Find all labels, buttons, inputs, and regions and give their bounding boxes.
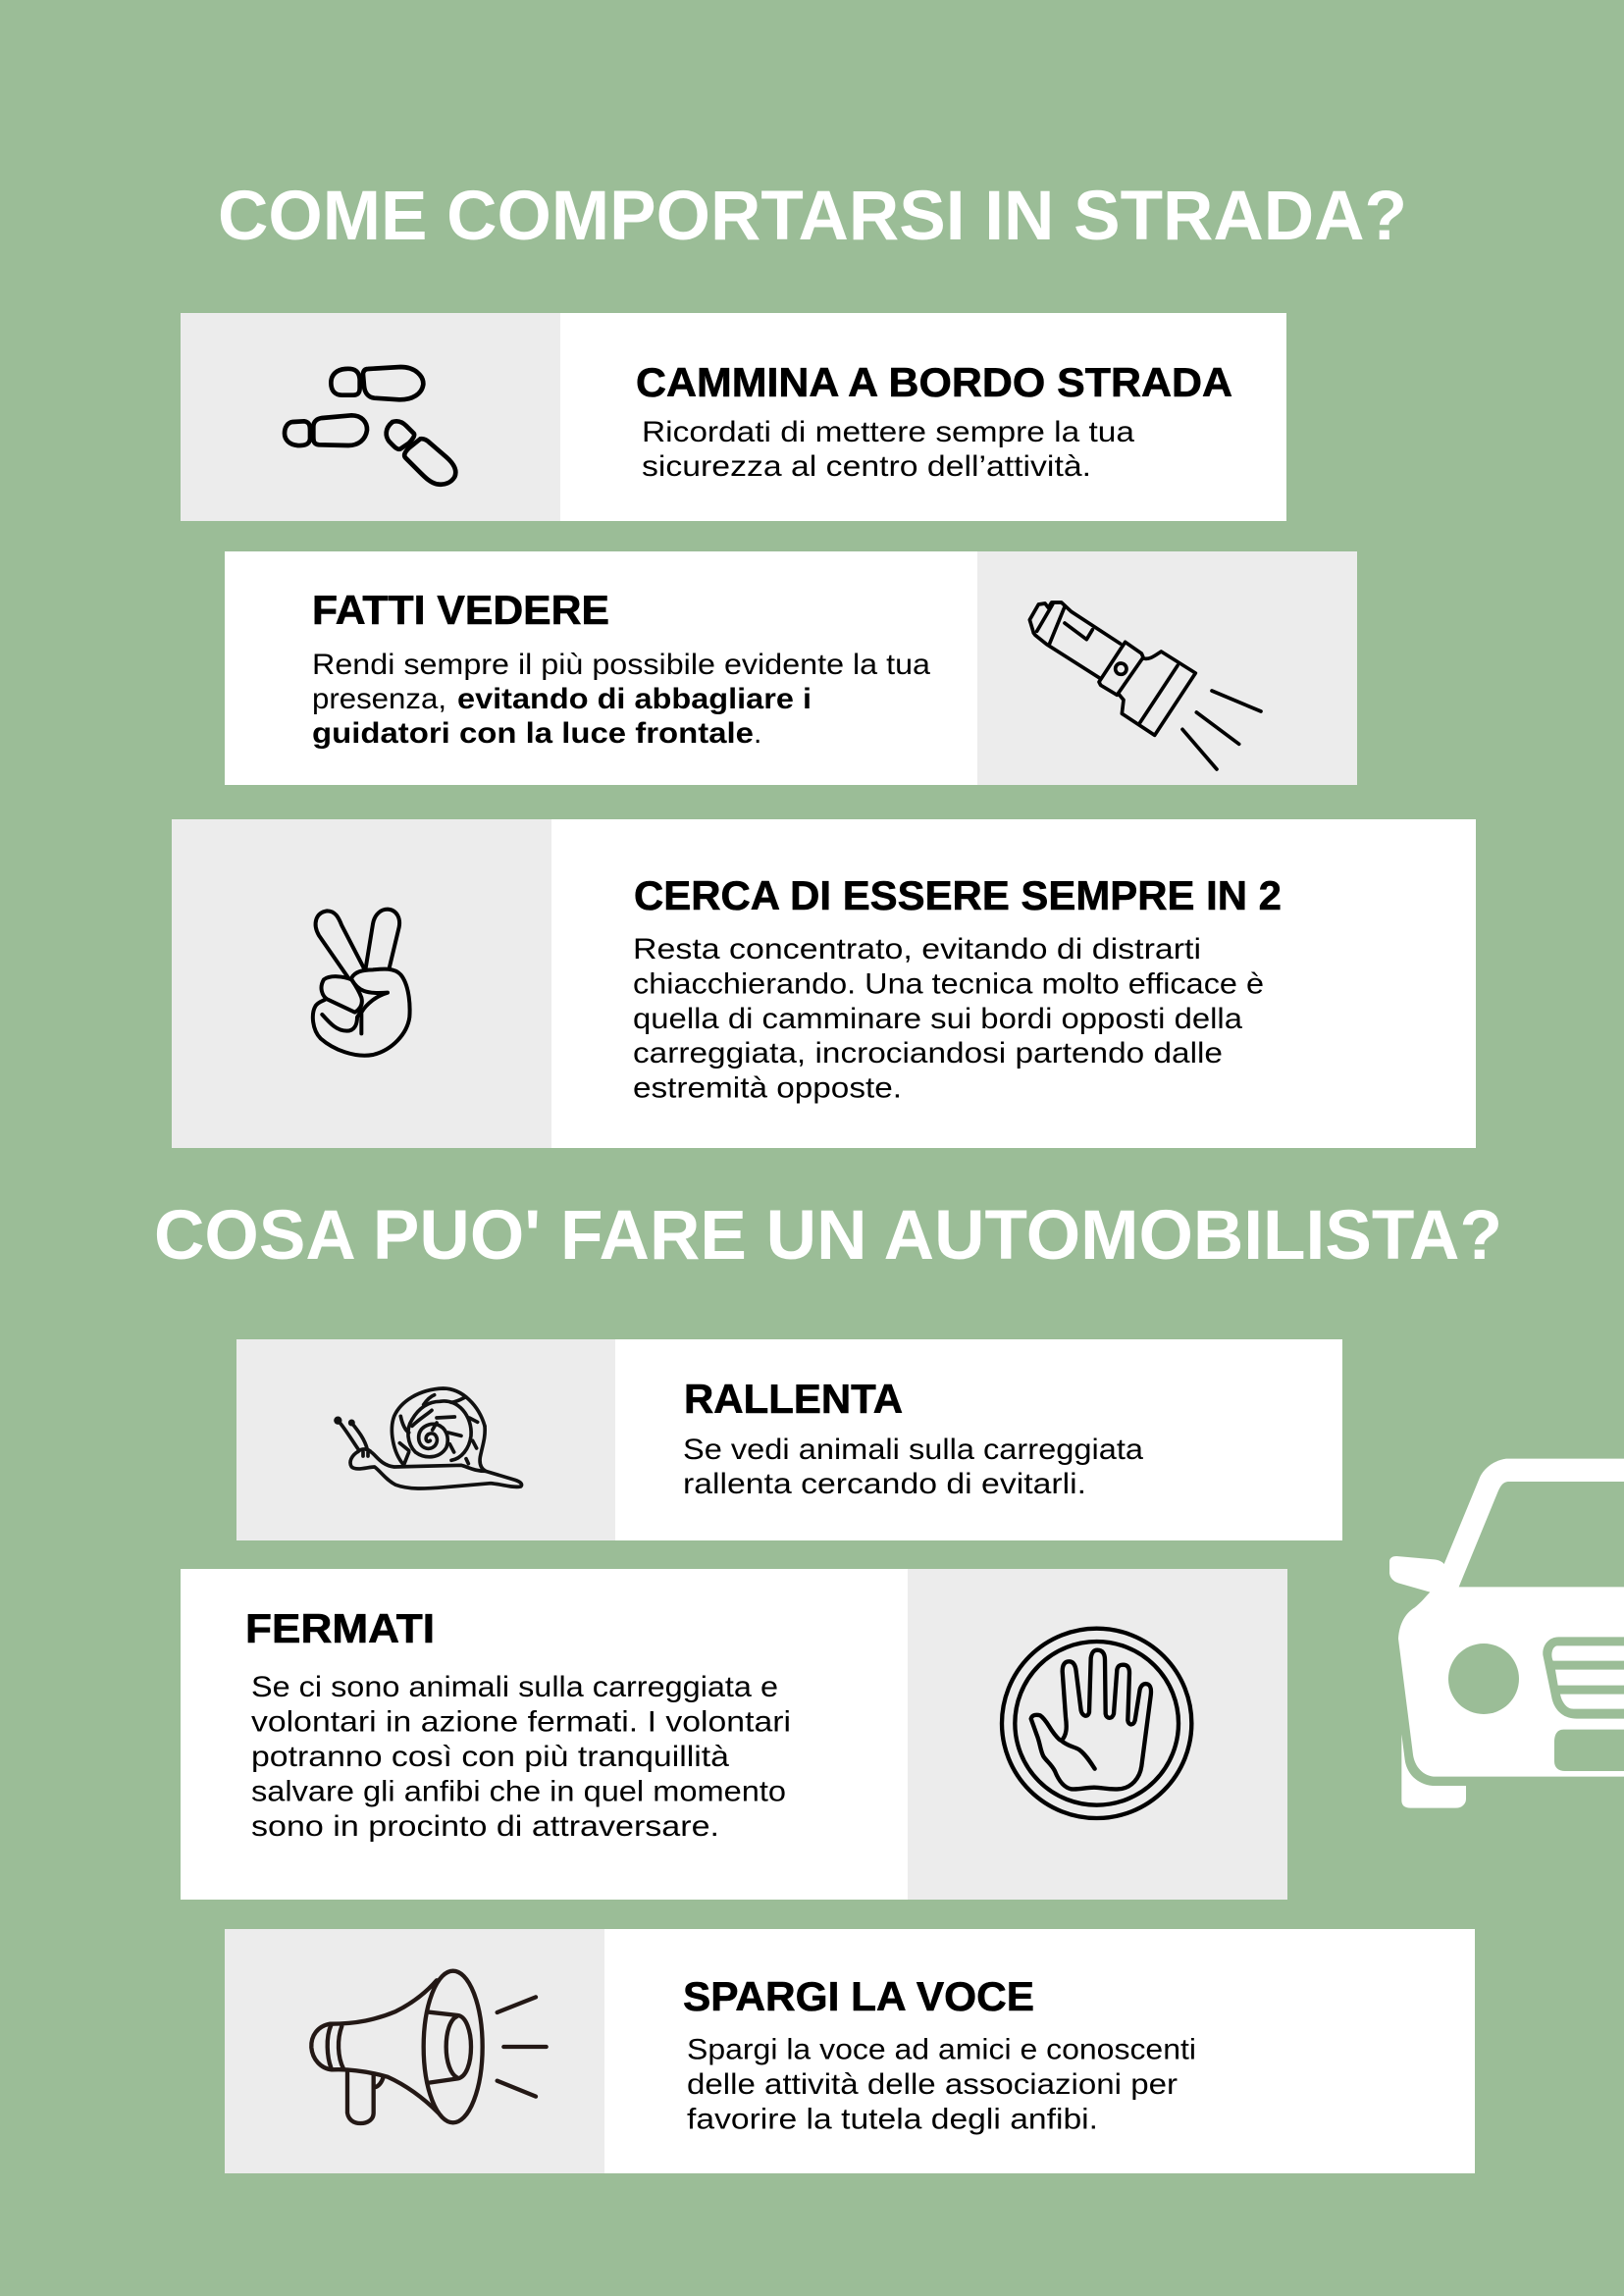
heading: CERCA DI ESSERE SEMPRE IN 2 (634, 872, 1282, 918)
body text (312, 649, 930, 750)
icon: white car (1389, 1459, 1624, 1808)
body text: rallenta cercando di evitarli. (683, 1468, 1086, 1500)
card background (172, 819, 1476, 1148)
icon tile (977, 551, 1357, 785)
body text: . (754, 717, 761, 750)
body text: Se vedi animali sulla carreggiata (683, 1434, 1143, 1466)
icon: footprints (285, 367, 455, 485)
body text: sono in procinto di attraversare. (251, 1810, 719, 1843)
body text: guidatori con la luce frontale (312, 717, 754, 750)
body text: estremità opposte. (633, 1071, 902, 1105)
panel: fatti vedere (225, 551, 1357, 785)
panel: rallenta (236, 1339, 1342, 1540)
icon: flashlight (1029, 602, 1261, 769)
heading: FERMATI (245, 1605, 435, 1651)
body text: Ricordati di mettere sempre la tua (642, 416, 1134, 448)
title: come comportarsi in strada: COME COMPORTARSI IN STRADA? (218, 178, 1407, 255)
icon tile (236, 1339, 615, 1540)
panel: cerca di essere sempre in 2 (172, 819, 1476, 1148)
title: cosa puo fare un automobilista: COSA PUO' FARE UN AUTOMOBILISTA? (154, 1197, 1502, 1275)
body text: volontari in azione fermati. I volontari (251, 1705, 791, 1739)
icon tile (225, 1929, 604, 2173)
card background (236, 1339, 1342, 1540)
icon tile (172, 819, 551, 1148)
body text (633, 933, 1264, 1105)
panel: cammina a bordo strada (181, 313, 1286, 521)
body text: Spargi la voce ad amici e conoscenti (687, 2033, 1196, 2066)
icon tile (181, 313, 560, 521)
heading: FATTI VEDERE (312, 587, 609, 633)
icon: peace hand (313, 910, 410, 1056)
body text (642, 416, 1134, 483)
body text: salvare gli anfibi che in quel momento (251, 1776, 786, 1807)
icon: stop hand (1002, 1629, 1191, 1818)
icon tile (908, 1569, 1287, 1900)
card background (225, 1929, 1475, 2173)
heading: RALLENTA (684, 1376, 903, 1422)
panel: fermati (181, 1569, 1287, 1900)
body text: quella di camminare sui bordi opposti della (633, 1003, 1242, 1035)
body text (683, 1434, 1143, 1500)
icon: snail (336, 1388, 522, 1488)
body text: evitando di abbagliare i (457, 683, 812, 715)
body text: carreggiata, incrociandosi partendo dalle (633, 1037, 1223, 1070)
card background (181, 313, 1286, 521)
body text: presenza, (312, 683, 446, 715)
body text: potranno così con più tranquillità (251, 1741, 729, 1773)
body text: sicurezza al centro dell’attività. (642, 450, 1091, 483)
body text: chiacchierando. Una tecnica molto efficace è (633, 967, 1264, 1001)
body text: favorire la tutela degli anfibi. (687, 2104, 1098, 2135)
card background (225, 551, 1357, 785)
body text: Resta concentrato, evitando di distrarti (633, 933, 1201, 965)
heading: SPARGI LA VOCE (683, 1973, 1034, 2019)
body text (687, 2033, 1196, 2135)
body text: delle attività delle associazioni per (687, 2068, 1178, 2101)
body text (251, 1671, 791, 1843)
body text: Rendi sempre il più possibile evidente la tua (312, 649, 930, 681)
body text: Se ci sono animali sulla carreggiata e (251, 1671, 778, 1703)
panel: spargi la voce (225, 1929, 1475, 2173)
card background (181, 1569, 1287, 1900)
icon: megaphone (311, 1971, 547, 2123)
heading: CAMMINA A BORDO STRADA (636, 359, 1232, 405)
